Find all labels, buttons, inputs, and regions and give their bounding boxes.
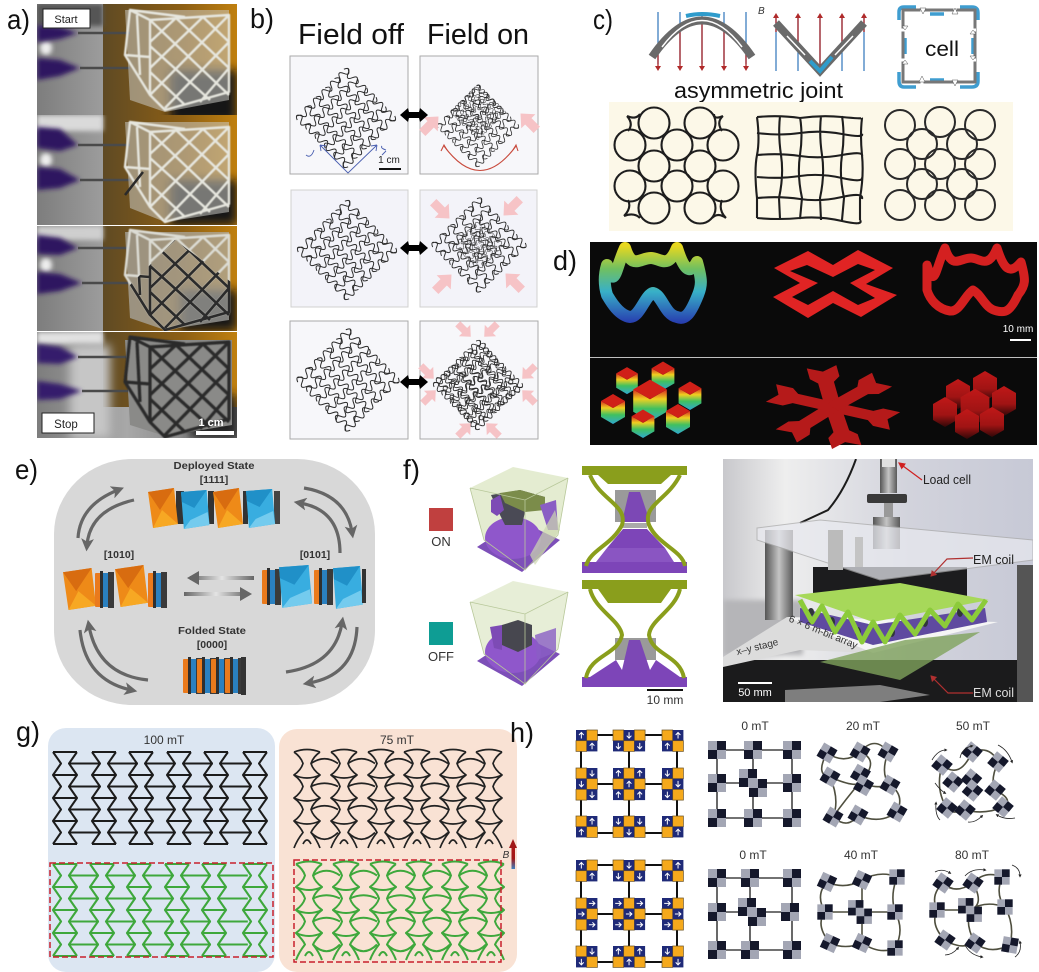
state 0101 label: [0101]	[300, 549, 330, 561]
red flat flake	[766, 365, 900, 449]
label 50 mT: 50 mT	[956, 719, 991, 733]
3D element ON	[470, 467, 568, 572]
state 1010 label: [1010]	[104, 549, 134, 561]
green simulated lattice	[53, 864, 267, 956]
curved arrows	[78, 488, 357, 690]
folded state heading: [0000]	[197, 639, 227, 651]
photo 80 mT	[929, 865, 1020, 957]
rainbow simulated ring	[605, 248, 701, 318]
label e: e)	[15, 454, 38, 485]
Stop tag	[42, 413, 94, 433]
photo: start frame	[37, 4, 237, 123]
state 0101 origami	[262, 565, 366, 609]
photo 40 mT	[817, 869, 905, 956]
joint bent by upward field	[773, 13, 867, 71]
state 1010 origami	[63, 565, 167, 610]
100 mT label: 100 mT	[144, 733, 185, 747]
deployed state heading	[174, 460, 255, 486]
frame row 1 off	[290, 56, 408, 174]
field arrow B: B	[503, 850, 510, 861]
Start tag: Start	[54, 14, 78, 26]
green simulated lattice	[296, 862, 504, 960]
ON swatch	[429, 508, 453, 549]
frame row 3 on	[415, 318, 541, 442]
double arrow row 2	[400, 241, 428, 255]
75 mT label: 75 mT	[380, 733, 415, 747]
EM coil label top: EM coil	[973, 552, 1014, 567]
label a: a)	[7, 4, 30, 35]
red experimental blocks	[933, 371, 1016, 439]
frame row 1 on	[415, 56, 544, 174]
arrow leftward	[187, 571, 254, 585]
OFF swatch: OFF	[428, 649, 454, 664]
label 0 mT bottom: 0 mT	[739, 848, 767, 862]
lattice right	[885, 107, 995, 220]
arrow rightward	[184, 587, 252, 601]
Start tag	[43, 9, 90, 28]
section OFF	[582, 580, 687, 687]
Load cell label	[899, 463, 971, 487]
double arrow row 3	[400, 375, 428, 389]
panel e: origami state cycle	[54, 459, 375, 705]
scale 50 mm: 50 mm	[738, 687, 772, 699]
red flat X ring	[773, 250, 897, 318]
scale 10 mm: 10 mm	[647, 693, 683, 707]
label 0 mT top: 0 mT	[741, 719, 769, 733]
dashed reference box	[294, 860, 501, 962]
panel g: 75 mT	[279, 729, 517, 972]
asymmetric joint text: asymmetric joint	[674, 78, 843, 103]
scale bar 1 cm	[196, 417, 234, 435]
label 40 mT: 40 mT	[844, 848, 879, 862]
photo: second frame	[37, 115, 237, 225]
lattice left	[614, 108, 738, 224]
label c: c)	[593, 4, 613, 35]
label 20 mT: 20 mT	[846, 719, 881, 733]
black experimental lattice	[53, 752, 267, 844]
lattice middle	[756, 116, 863, 223]
frame row 2 off	[291, 190, 408, 307]
cell text: cell	[925, 38, 959, 61]
label b: b)	[250, 3, 274, 34]
unit cell	[899, 6, 978, 88]
section ON	[582, 466, 687, 573]
field arrow B	[503, 839, 517, 869]
dashed reference box	[50, 863, 273, 957]
photo 50 mT	[931, 741, 1015, 822]
scale 50 mm	[738, 682, 772, 699]
heading Field off: Field off	[298, 19, 405, 51]
x-y stage label: x–y stage	[735, 637, 780, 658]
photo f: m-bit array test rig	[723, 459, 1033, 702]
label 80 mT: 80 mT	[955, 848, 990, 862]
ON swatch: ON	[431, 534, 451, 549]
Stop tag: Stop	[54, 419, 78, 431]
schematic h top	[576, 730, 683, 837]
3D element OFF	[470, 581, 568, 686]
panel f: bistable element	[428, 466, 687, 707]
black experimental lattice	[294, 750, 502, 848]
photo 0 mT bottom	[708, 869, 801, 959]
folded state heading: Folded State	[178, 625, 246, 637]
panel b: kirigami lattice frames	[290, 56, 544, 442]
folded origami	[183, 657, 246, 695]
frame row 2 on	[420, 190, 537, 307]
photo: third frame	[37, 226, 237, 331]
label g: g)	[16, 716, 40, 747]
scale 10 mm: 10 mm	[1003, 324, 1033, 335]
frame row 3 off	[290, 321, 408, 439]
panel a: photo sequence	[37, 4, 237, 438]
label f: f)	[403, 454, 420, 485]
cream panel with lattices	[609, 102, 1013, 231]
red experimental ring	[927, 248, 1024, 312]
deployed state heading: [1111]	[200, 474, 228, 486]
B label: B	[758, 6, 765, 17]
array label: 6 × 6 m-bit array	[787, 614, 859, 651]
label h: h)	[510, 717, 534, 748]
OFF swatch	[428, 622, 454, 664]
scale bar 1 cm: 1 cm	[198, 417, 224, 429]
photo: stop frame	[37, 332, 237, 438]
photo 20 mT	[817, 742, 907, 827]
folded state heading	[178, 625, 246, 651]
panel d: black experimental panel	[590, 242, 1037, 449]
EM coil label top	[932, 552, 1014, 575]
joint bent by downward field	[652, 12, 752, 71]
Load cell label: Load cell	[923, 472, 971, 487]
heading Field on: Field on	[427, 19, 529, 51]
panel c: joints diagram	[609, 6, 1013, 231]
panel g: 100 mT	[48, 728, 275, 972]
photo 0 mT top	[708, 741, 801, 827]
label d: d)	[553, 245, 577, 276]
EM coil label bottom	[932, 677, 1014, 700]
schematic h bottom	[576, 860, 683, 967]
scale 10 mm	[1003, 324, 1033, 341]
deployed state heading: Deployed State	[174, 460, 255, 472]
rainbow simulated blocks	[601, 362, 701, 438]
deployed origami	[148, 488, 280, 529]
double arrow row 1	[400, 108, 428, 122]
frame row 1 off: 1 cm	[378, 155, 400, 166]
EM coil label bottom: EM coil	[973, 685, 1014, 700]
